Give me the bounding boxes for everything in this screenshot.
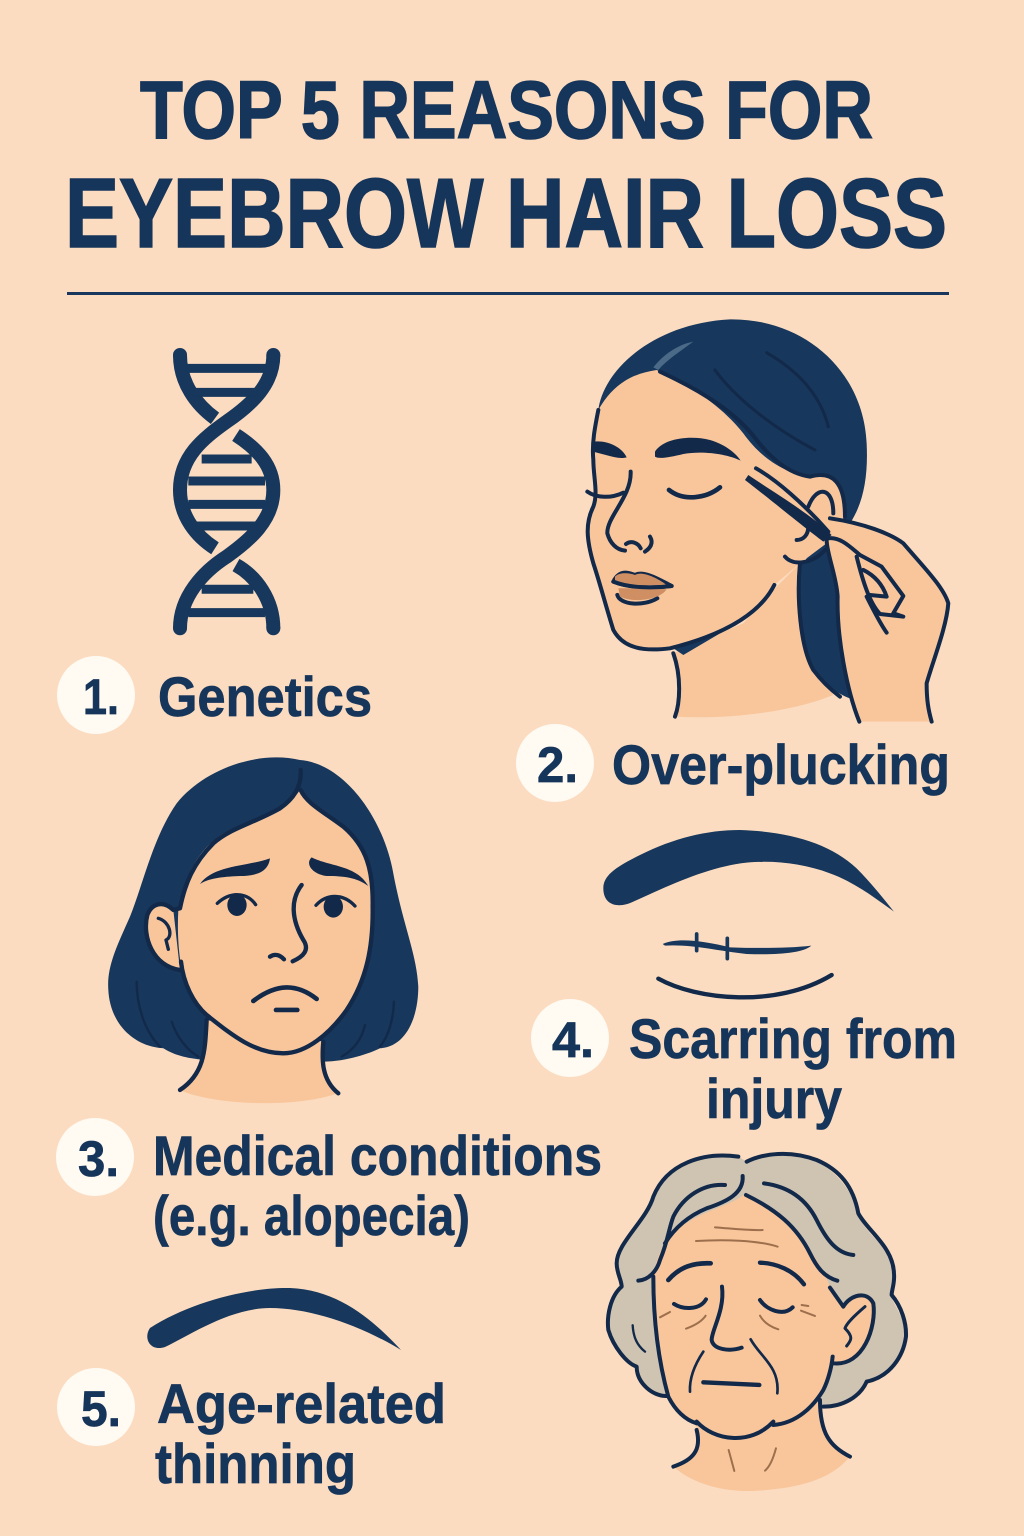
- badge 1: Genetics: 1.: [83, 669, 119, 725]
- badge 3: Medical conditions: Medical conditions: [153, 1124, 602, 1187]
- badge 2: Over-plucking: Over-plucking: [612, 733, 950, 796]
- badge 5: Age-related thinning: Age-related: [157, 1372, 446, 1435]
- badge 3: Medical conditions: (e.g. alopecia): [153, 1184, 470, 1247]
- badge 5: Age-related thinning: thinning: [155, 1432, 356, 1495]
- icon: thin eyebrow: [147, 1288, 401, 1350]
- badge 5: Age-related thinning: 5.: [81, 1381, 121, 1437]
- illustration: woman plucking eyebrow: [587, 319, 948, 722]
- badge 1: Genetics: [57, 656, 372, 734]
- badge 4: Scarring from injury: Scarring from: [629, 1007, 957, 1070]
- badge 3: Medical conditions: 3.: [78, 1131, 119, 1187]
- badge 3: Medical conditions: [56, 1118, 602, 1247]
- icon: DNA double helix: [180, 355, 273, 628]
- badge 4: Scarring from injury: [531, 999, 957, 1130]
- badge 1: Genetics: Genetics: [158, 665, 372, 728]
- illustration: elderly woman: [608, 1152, 907, 1491]
- illustration: worried woman with hair loss: [108, 757, 418, 1103]
- badge 5: Age-related thinning: [57, 1368, 446, 1495]
- illustration: eyebrow with scar: [603, 830, 894, 997]
- badge 2: Over-plucking: 2.: [537, 737, 578, 793]
- badge 4: Scarring from injury: 4.: [552, 1012, 594, 1068]
- title: TOP 5 REASONS FOR: [140, 65, 873, 156]
- title: [65, 65, 947, 268]
- badge 4: Scarring from injury: injury: [706, 1067, 842, 1130]
- badge 2: Over-plucking: [516, 724, 950, 802]
